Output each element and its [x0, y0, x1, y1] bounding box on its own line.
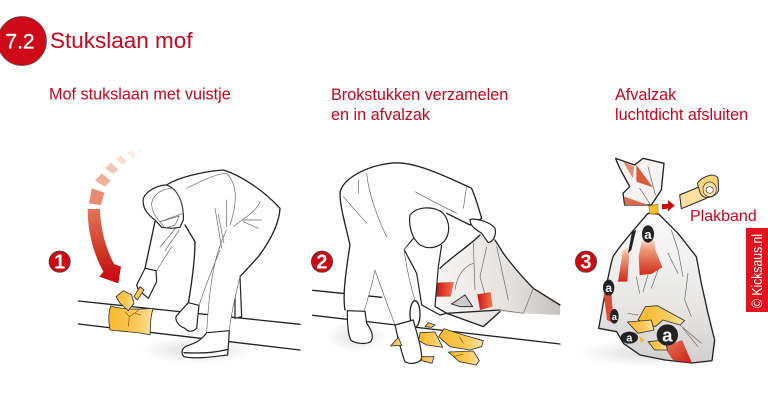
copyright tab	[746, 228, 768, 312]
bag body: a	[605, 281, 612, 295]
step 1 heading: Mof stukslaan met vuistje	[49, 86, 231, 104]
boot	[347, 311, 372, 343]
far leg of suit	[404, 237, 447, 315]
floor shadow	[578, 340, 718, 367]
tape label: Plakband	[690, 208, 757, 225]
step 3 heading: Afvalzak	[615, 86, 677, 104]
small red arrow	[662, 200, 675, 211]
panel: step 3 illustration	[575, 158, 719, 367]
pipe	[78, 301, 300, 350]
bag body: a	[626, 332, 632, 344]
cracked sleeve	[109, 306, 153, 335]
floor shadow	[327, 322, 387, 352]
suit body	[340, 163, 482, 325]
near glove	[176, 303, 199, 331]
mof fragments	[391, 323, 483, 365]
open waste bag	[435, 235, 560, 327]
bag logos	[642, 225, 654, 243]
number 1: 1	[54, 252, 65, 274]
hood	[410, 208, 449, 248]
bag body: a	[644, 227, 652, 242]
number 3	[575, 251, 597, 274]
tied top of bag	[616, 158, 664, 205]
arm holding bag	[470, 219, 495, 243]
hood	[143, 185, 183, 228]
curved motion arrow	[88, 147, 141, 283]
floor shadow	[140, 337, 253, 363]
title badge	[0, 16, 46, 66]
bag body: a	[662, 325, 673, 346]
step 2 heading: en in afvalzak	[331, 106, 431, 124]
reaching glove	[395, 320, 422, 363]
bag body	[599, 213, 715, 363]
panel: step 1 illustration	[49, 147, 300, 363]
number 1	[49, 251, 70, 274]
number 2: 2	[316, 252, 328, 274]
step 3 heading: luchtdicht afsluiten	[615, 106, 748, 124]
back leg	[235, 277, 242, 318]
number 3: 3	[580, 252, 592, 274]
step 2 heading: Brokstukken verzamelen	[331, 86, 508, 104]
panel: step 2 illustration	[311, 163, 560, 365]
title: Stukslaan mof	[50, 28, 193, 53]
far arm	[145, 222, 187, 271]
tape roll	[680, 175, 719, 209]
number 2	[311, 251, 333, 274]
tape around neck	[649, 204, 658, 214]
copyright tab: © Kicksaus.nl	[749, 234, 765, 308]
boot	[182, 331, 229, 358]
title badge: 7.2	[5, 30, 35, 54]
pipe	[313, 290, 560, 344]
bag body: a	[612, 312, 618, 322]
sleeve cuff	[410, 301, 420, 327]
suit body	[167, 170, 280, 333]
hand and hammering fist	[116, 268, 157, 311]
